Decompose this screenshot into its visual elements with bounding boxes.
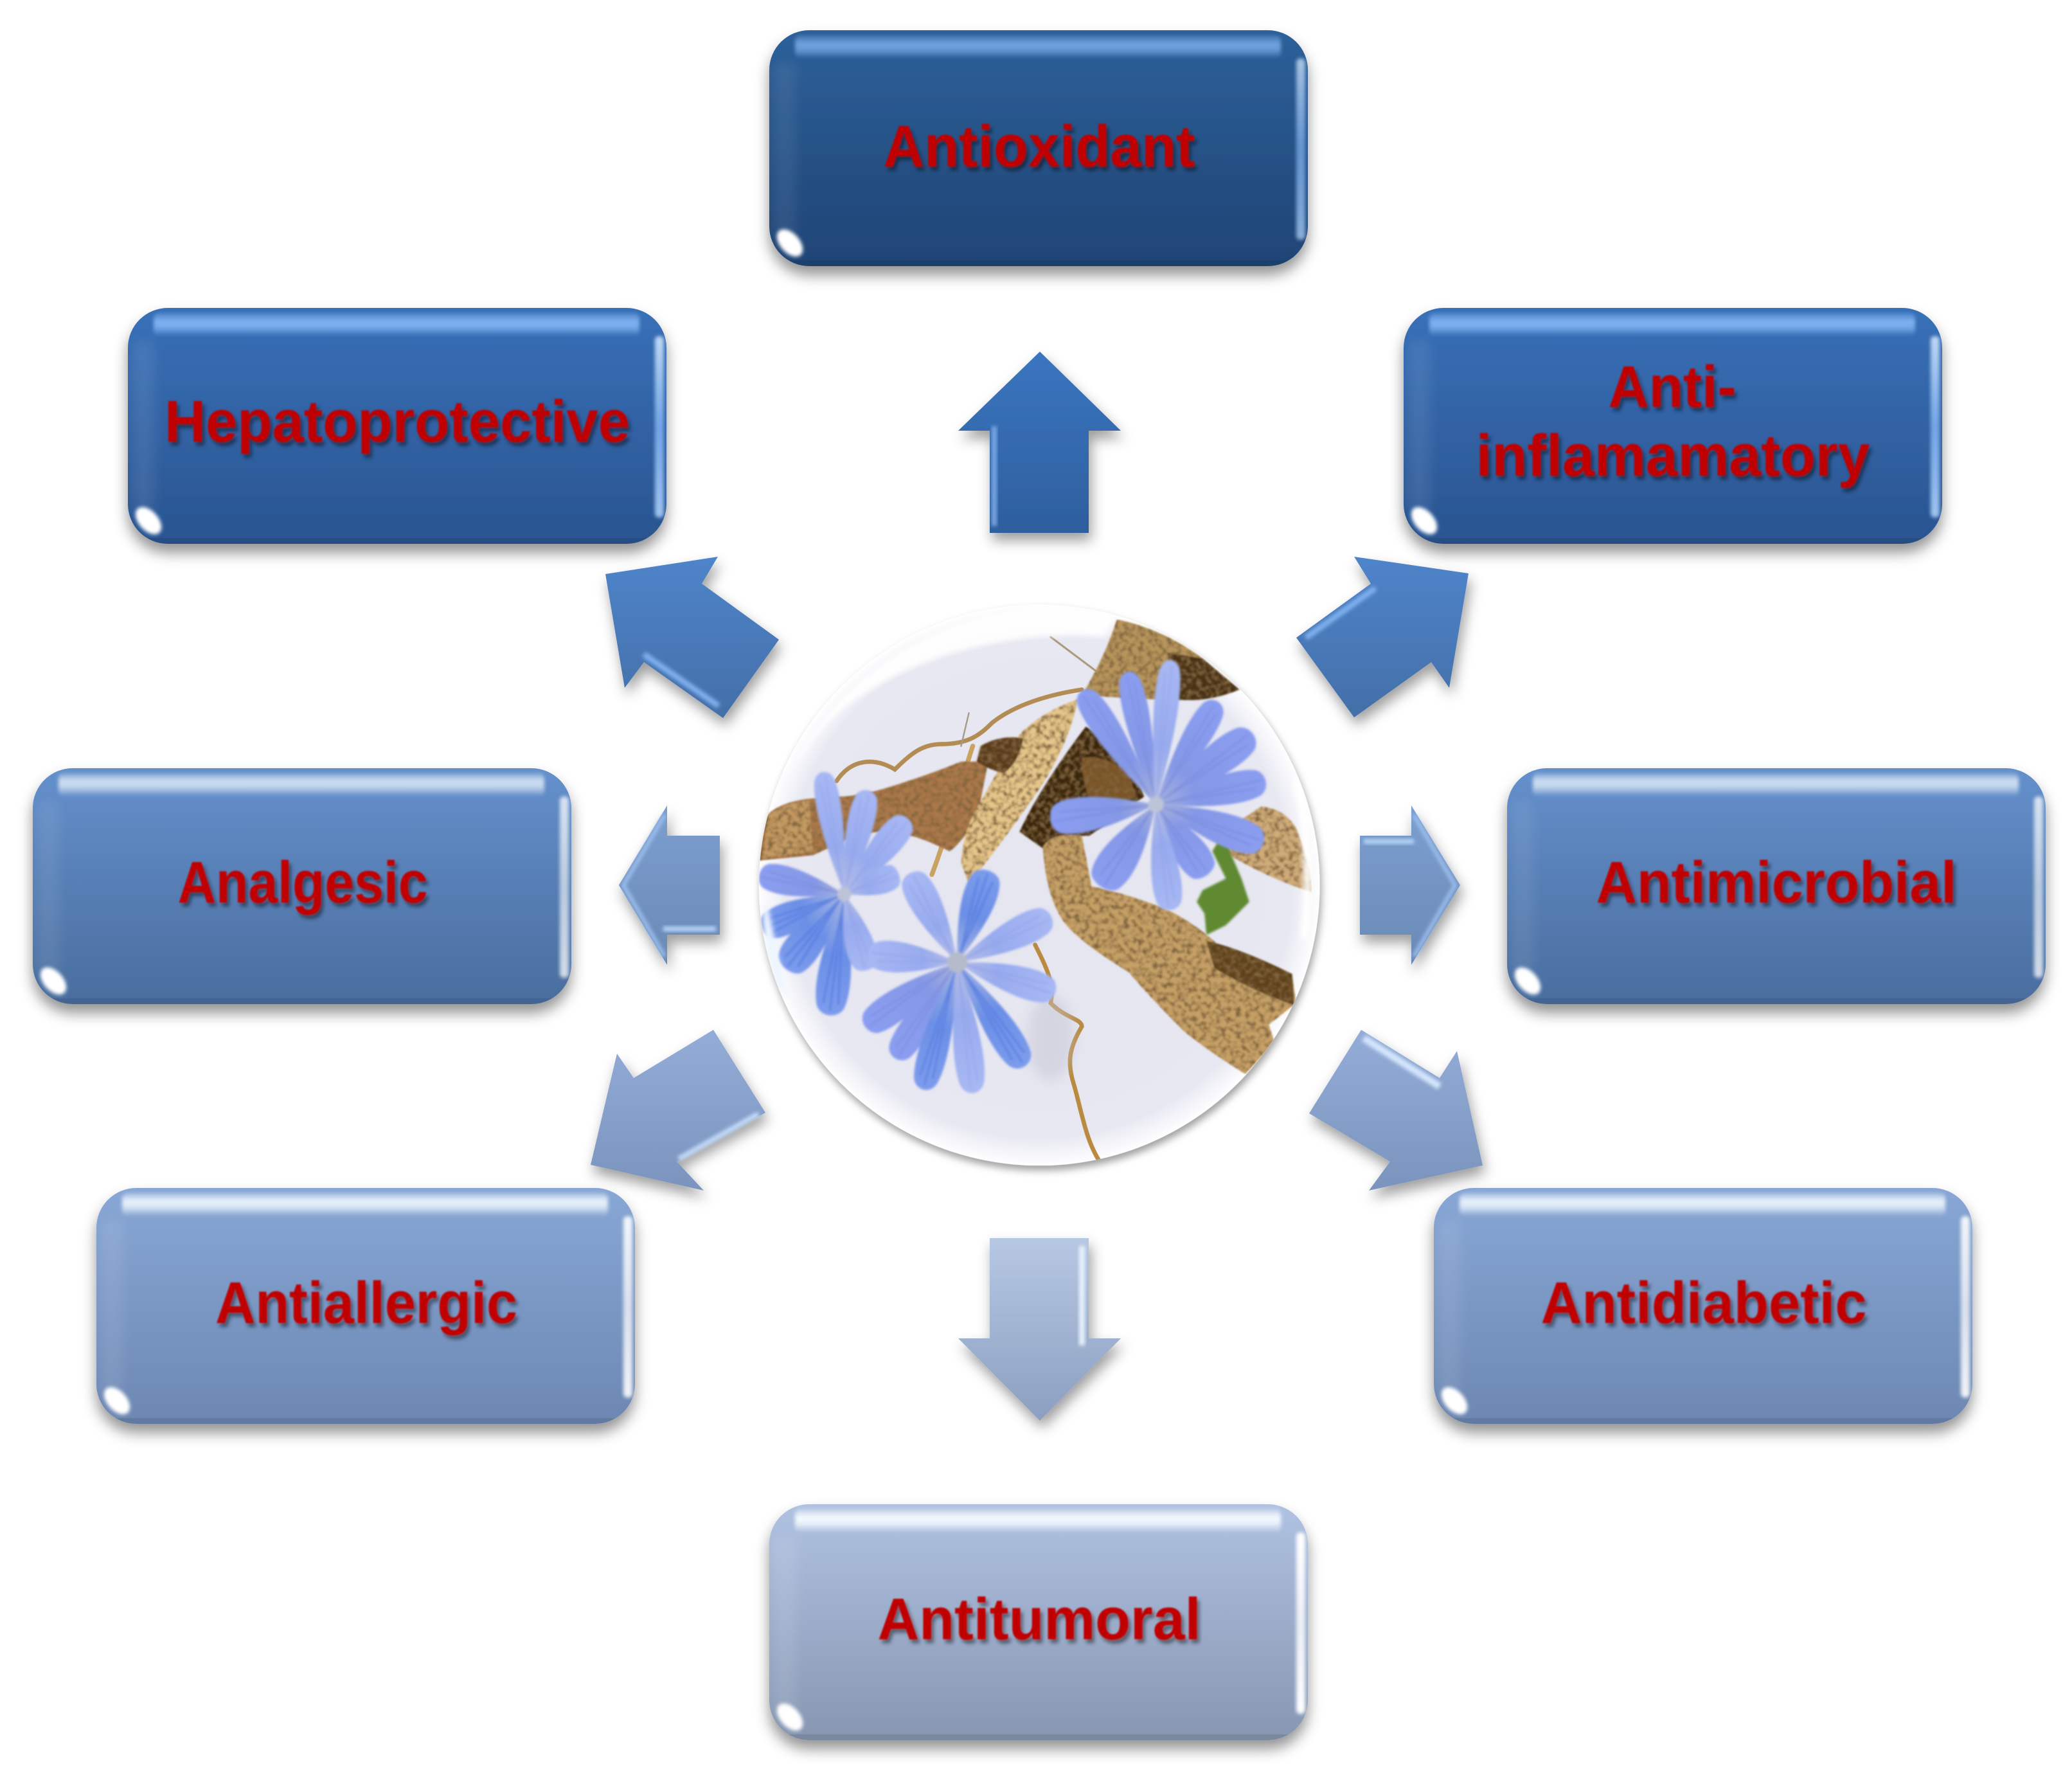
arrow: left to Analgesic xyxy=(619,805,720,965)
label: Hepatoprotective: Hepatoprotective xyxy=(165,389,630,454)
box: Antiallergic xyxy=(96,1188,635,1424)
central photo: chicory flowers and roots in a glossy circle xyxy=(755,605,1320,1165)
label: Analgesic: Analgesic xyxy=(177,850,428,915)
flower shadows xyxy=(1027,995,1074,1081)
arrow: down-left to Antiallergic xyxy=(591,1030,765,1191)
arrow: up to Antioxidant xyxy=(958,352,1121,533)
flower: lower middle xyxy=(856,865,1060,1095)
label: Antioxidant: Antioxidant xyxy=(883,114,1195,179)
box: Analgesic xyxy=(33,768,571,1004)
arrow: down to Antitumoral xyxy=(958,1238,1121,1421)
box: Anti-inflamamatory xyxy=(1404,308,1942,544)
bark masses xyxy=(755,620,1312,1074)
label: Anti-inflamamatory: Anti- xyxy=(1608,354,1737,420)
rootlets xyxy=(837,637,1100,1161)
box: Antitumoral xyxy=(769,1504,1308,1740)
arrow: up-left to Hepatoprotective xyxy=(605,557,779,718)
label: Antiallergic: Antiallergic xyxy=(215,1270,517,1336)
label: Antidiabetic: Antidiabetic xyxy=(1541,1270,1866,1336)
arrow: up-right to Anti-inflamamatory xyxy=(1296,557,1469,717)
label: Antimicrobial: Antimicrobial xyxy=(1596,850,1956,915)
box: Antidiabetic xyxy=(1434,1188,1972,1424)
box: Antioxidant xyxy=(769,30,1308,266)
glass highlights xyxy=(833,616,1107,715)
arrow: right to Antimicrobial xyxy=(1360,805,1460,965)
label: Antitumoral: Antitumoral xyxy=(878,1587,1201,1652)
label: Anti-inflamamatory: inflamamatory xyxy=(1476,423,1870,489)
box: Hepatoprotective xyxy=(128,308,666,544)
flower: left xyxy=(756,770,919,1018)
leaf xyxy=(1197,832,1249,935)
label: Anti-inflamamatory xyxy=(1476,354,1870,489)
arrow: down-right to Antidiabetic xyxy=(1309,1030,1483,1191)
flower: upper right xyxy=(1048,659,1269,912)
box: Antimicrobial xyxy=(1507,768,2046,1004)
